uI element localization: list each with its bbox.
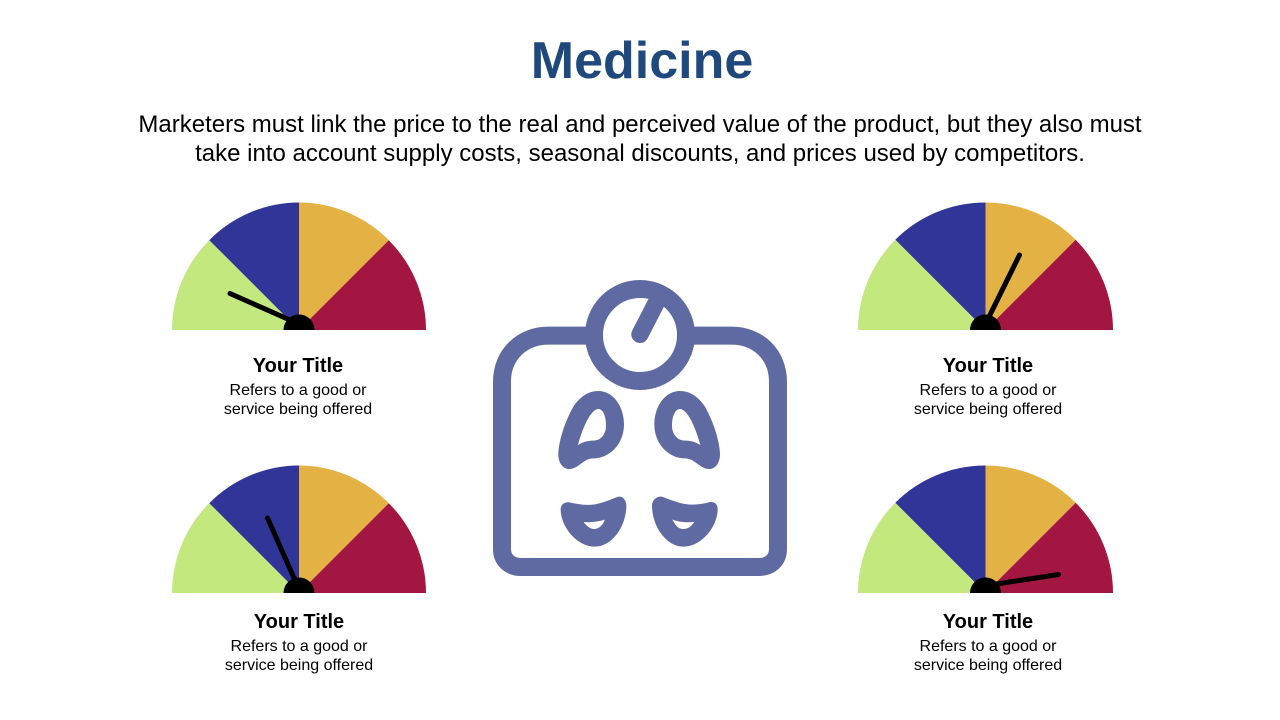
caption: top right: Your Title (943, 355, 1033, 377)
caption: top right: Refers to a good or (920, 382, 1056, 399)
caption: top right: service being offered (914, 401, 1062, 418)
gauge: bottom right (858, 466, 1113, 593)
caption: top left: service being offered (224, 401, 372, 418)
left lower footprint (561, 497, 626, 547)
intro paragraph (138, 111, 1142, 167)
right lower footprint (652, 497, 718, 547)
caption: top left (224, 355, 372, 418)
caption: bottom right: Your Title (943, 611, 1033, 633)
scale dial (594, 289, 686, 381)
intro paragraph: take into account supply costs, seasonal discounts, and prices used by competitors. (195, 140, 1085, 167)
scale body (502, 336, 778, 567)
icon: weighing scale with footprints (502, 289, 778, 567)
intro paragraph: Marketers must link the price to the real and perceived value of the product, but they also must (138, 111, 1142, 138)
left upper footprint (558, 391, 624, 469)
caption: bottom left: Your Title (254, 611, 344, 633)
gauge: top left (172, 202, 426, 330)
caption: top left: Your Title (253, 355, 343, 377)
caption: bottom right: service being offered (914, 657, 1062, 674)
caption: bottom left (225, 611, 373, 674)
caption: top left: Refers to a good or (230, 382, 366, 399)
caption: bottom left: service being offered (225, 657, 373, 674)
gauge: bottom left (172, 466, 426, 593)
caption: bottom left: Refers to a good or (231, 638, 367, 655)
caption: bottom right: Refers to a good or (920, 638, 1056, 655)
caption: bottom right (914, 611, 1062, 674)
gauge: top right (858, 202, 1113, 330)
dial needle (640, 303, 656, 334)
right upper footprint (654, 391, 720, 469)
caption: top right (914, 355, 1062, 418)
title: Medicine (531, 32, 753, 90)
